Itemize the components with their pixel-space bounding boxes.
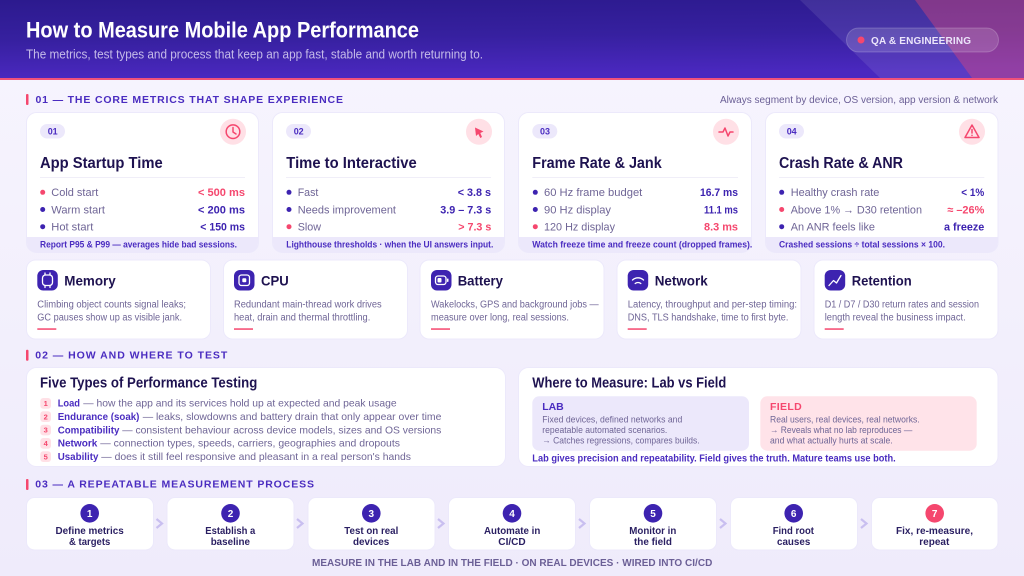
- panel: memory: Memory: [64, 273, 116, 289]
- section heading 01: 01 — THE CORE METRICS THAT SHAPE EXPERIENCE: [36, 94, 343, 106]
- card title: App Startup Time: [40, 155, 163, 172]
- panel: frame rate and jank: 60 Hz frame budget: [544, 187, 642, 199]
- panel: battery: Battery: [458, 273, 503, 289]
- panel: app startup time: [26, 112, 258, 252]
- card title: Time to Interactive: [286, 155, 417, 172]
- process step 4: [448, 498, 576, 550]
- panel: crash rate and ANR: [766, 112, 998, 252]
- icon: pulse: [713, 119, 739, 145]
- panel: crash rate and ANR: 04: [787, 126, 797, 138]
- panel: frame rate and jank: 03: [540, 126, 550, 138]
- field box: [760, 396, 977, 451]
- lab box: → Catches regressions, compares builds.: [542, 435, 700, 446]
- process step 7: Fix, re-measure,: [896, 525, 973, 537]
- process step 3: 3: [368, 509, 374, 520]
- arrow: [156, 519, 162, 528]
- test type: endurance: — leaks, slowdowns and battery drain that only appear over time: [143, 411, 442, 423]
- panel: time to interactive: > 7.3 s: [458, 222, 491, 234]
- panel: memory: Climbing object counts signal leaks;: [37, 300, 186, 310]
- panel: memory: GC pauses show up as visible jank.: [37, 312, 182, 324]
- panel: frame rate and jank: 8.3 ms: [704, 222, 738, 234]
- process step 6: 6: [791, 509, 797, 520]
- panel: crash rate and ANR: ≈ –26%: [947, 204, 985, 216]
- panel: app startup time: < 200 ms: [198, 204, 245, 216]
- test type: usability: Usability: [58, 451, 99, 463]
- panel: app startup time: Cold start: [51, 187, 98, 199]
- process step 5: [590, 498, 716, 550]
- panel: crash rate and ANR: Above 1% → D30 retention: [791, 204, 922, 216]
- process step 5: Monitor in: [629, 525, 676, 537]
- test type: endurance: 2: [44, 412, 48, 421]
- process step 5: the field: [634, 536, 672, 548]
- process step 4: Automate in: [484, 525, 540, 537]
- test type: compatibility: — consistent behaviour across device models, sizes and OS versions: [122, 424, 441, 436]
- panel: time to interactive: 3.9 – 7.3 s: [440, 204, 491, 216]
- panel: time to interactive: Fast: [298, 187, 318, 199]
- icon: clock: [220, 119, 246, 145]
- test type: usability: 5: [44, 452, 48, 461]
- panel: frame rate and jank: [518, 112, 752, 252]
- panel: battery: [420, 260, 604, 339]
- panel: frame rate and jank: 90 Hz display: [544, 204, 611, 216]
- panel: app startup time: < 150 ms: [200, 222, 245, 234]
- panel: crash rate and ANR: Crashed sessions ÷ total sessions × 100.: [779, 240, 945, 250]
- panel: frame rate and jank: 11.1 ms: [704, 204, 738, 216]
- lab box: Fixed devices, defined networks and: [542, 415, 682, 426]
- panel: frame rate and jank: Watch freeze time and freeze count (dropped frames).: [532, 240, 752, 250]
- process step 1: [26, 498, 154, 550]
- lab box: LAB: [542, 401, 564, 413]
- panel: retention: Retention: [852, 273, 912, 289]
- panel: network: [617, 260, 801, 339]
- panel: crash rate and ANR: < 1%: [961, 187, 984, 199]
- section heading 03: 03 — A REPEATABLE MEASUREMENT PROCESS: [35, 478, 314, 490]
- panel: cpu: heat, drain and thermal throttling.: [234, 312, 370, 324]
- panel: crash rate and ANR: An ANR feels like: [791, 222, 875, 234]
- arrow: [720, 519, 726, 528]
- test type: endurance: Endurance (soak): [58, 411, 139, 423]
- panel: retention: length reveal the business impact.: [825, 312, 966, 324]
- panel: time to interactive: < 3.8 s: [458, 187, 491, 199]
- test type: compatibility: Compatibility: [58, 424, 120, 436]
- test type: network: Network: [58, 438, 98, 450]
- process step 4: 4: [509, 509, 515, 520]
- process step 3: [308, 498, 435, 550]
- process step 2: 2: [228, 509, 234, 520]
- panel: crash rate and ANR: a freeze: [944, 222, 984, 234]
- panel: retention: [814, 260, 998, 339]
- arrow: [861, 519, 866, 528]
- panel: network: Latency, throughput and per-step timing:: [628, 300, 797, 310]
- header banner: [0, 0, 1024, 80]
- panel: time to interactive: [272, 112, 504, 252]
- process step 3: devices: [353, 536, 389, 548]
- test type: network: — connection types, speeds, carriers, geographies and dropouts: [100, 438, 400, 450]
- field box: and what actually hurts at scale.: [770, 435, 893, 446]
- arrow: [438, 519, 444, 528]
- process step 6: Find root: [773, 525, 814, 537]
- field box: → Reveals what no lab reproduces —: [770, 425, 913, 436]
- test type: compatibility: 3: [44, 426, 48, 435]
- process step 7: repeat: [919, 536, 950, 548]
- process step 6: causes: [777, 536, 810, 548]
- panel: cpu: [224, 260, 408, 339]
- field box: FIELD: [770, 401, 802, 413]
- test type: load: 1: [44, 399, 48, 408]
- icon: retention trend: [825, 270, 845, 290]
- section heading 02: 02 — HOW AND WHERE TO TEST: [35, 350, 228, 362]
- icon: memory chip: [37, 270, 58, 290]
- panel: retention: D1 / D7 / D30 return rates and session: [825, 300, 979, 310]
- process step 3: Test on real: [344, 525, 398, 537]
- process step 1: 1: [87, 509, 93, 520]
- tag pill: QA & ENGINEERING: [871, 36, 971, 47]
- footer line: MEASURE IN THE LAB AND IN THE FIELD · ON REAL DEVICES · WIRED INTO CI/CD: [312, 558, 712, 569]
- panel: battery: Wakelocks, GPS and background jobs —: [431, 300, 599, 310]
- panel heading: Five Types of Performance Testing: [40, 375, 257, 391]
- panel: memory: [26, 260, 210, 339]
- panel: crash rate and ANR: Healthy crash rate: [791, 187, 879, 199]
- panel: frame rate and jank: 16.7 ms: [700, 187, 738, 199]
- panel: cpu: CPU: [261, 273, 289, 289]
- panel: app startup time: 01: [48, 126, 58, 138]
- panel heading: Where to Measure: Lab vs Field: [532, 375, 726, 391]
- process step 2: Establish a: [205, 525, 255, 537]
- title: How to Measure Mobile App Performance: [26, 18, 419, 43]
- test type: load: Load: [58, 398, 80, 410]
- icon: warning triangle: [959, 119, 985, 145]
- panel: frame rate and jank: 120 Hz display: [544, 222, 615, 234]
- panel: battery: measure over long, real sessions.: [431, 312, 569, 324]
- panel: network: DNS, TLS handshake, time to first byte.: [628, 312, 788, 324]
- arrow: [579, 519, 584, 528]
- test type: network: 4: [44, 439, 49, 448]
- process step 1: & targets: [69, 536, 110, 548]
- icon: battery: [431, 270, 452, 290]
- lab box: [532, 396, 749, 451]
- process step 4: CI/CD: [498, 536, 526, 548]
- process step 2: [167, 498, 294, 550]
- test type: load: — how the app and its services hold up at expected and peak usage: [83, 398, 397, 410]
- panel: five types of performance testing: [26, 368, 506, 466]
- process step 7: [872, 498, 998, 550]
- panel: time to interactive: 02: [294, 126, 304, 138]
- process step 7: 7: [932, 509, 938, 520]
- icon: cpu: [234, 270, 254, 290]
- icon: cursor: [466, 119, 492, 145]
- arrow: [297, 519, 302, 528]
- icon: network: [628, 270, 648, 290]
- test type: usability: — does it still feel responsive and pleasant in a real person's hands: [101, 451, 411, 463]
- panel: app startup time: Warm start: [51, 204, 105, 216]
- card title: Crash Rate & ANR: [779, 155, 903, 172]
- lab box: repeatable automated scenarios.: [542, 425, 667, 436]
- panel: app startup time: Report P95 & P99 — averages hide bad sessions.: [40, 240, 237, 250]
- subtitle: The metrics, test types and process that keep an app fast, stable and worth returning to.: [26, 48, 483, 62]
- card title: Frame Rate & Jank: [532, 155, 662, 172]
- process step 5: 5: [650, 509, 656, 520]
- segmentation note: Always segment by device, OS version, app version & network: [720, 95, 999, 106]
- panel: app startup time: < 500 ms: [198, 187, 245, 199]
- takeaway: Lab gives precision and repeatability. Field gives the truth. Mature teams use both.: [532, 454, 896, 465]
- panel: app startup time: Hot start: [51, 222, 93, 234]
- field box: Real users, real devices, real networks.: [770, 415, 920, 426]
- process step 1: Define metrics: [56, 525, 124, 537]
- panel: time to interactive: Lighthouse thresholds · when the UI answers input.: [286, 240, 493, 250]
- panel: lab vs field: [518, 368, 998, 466]
- process step 2: baseline: [211, 536, 250, 548]
- process step 6: [730, 498, 858, 550]
- panel: time to interactive: Slow: [298, 222, 321, 234]
- panel: time to interactive: Needs improvement: [298, 204, 396, 216]
- panel: network: Network: [655, 273, 708, 289]
- panel: cpu: Redundant main-thread work drives: [234, 300, 382, 310]
- tag pill: [846, 28, 998, 52]
